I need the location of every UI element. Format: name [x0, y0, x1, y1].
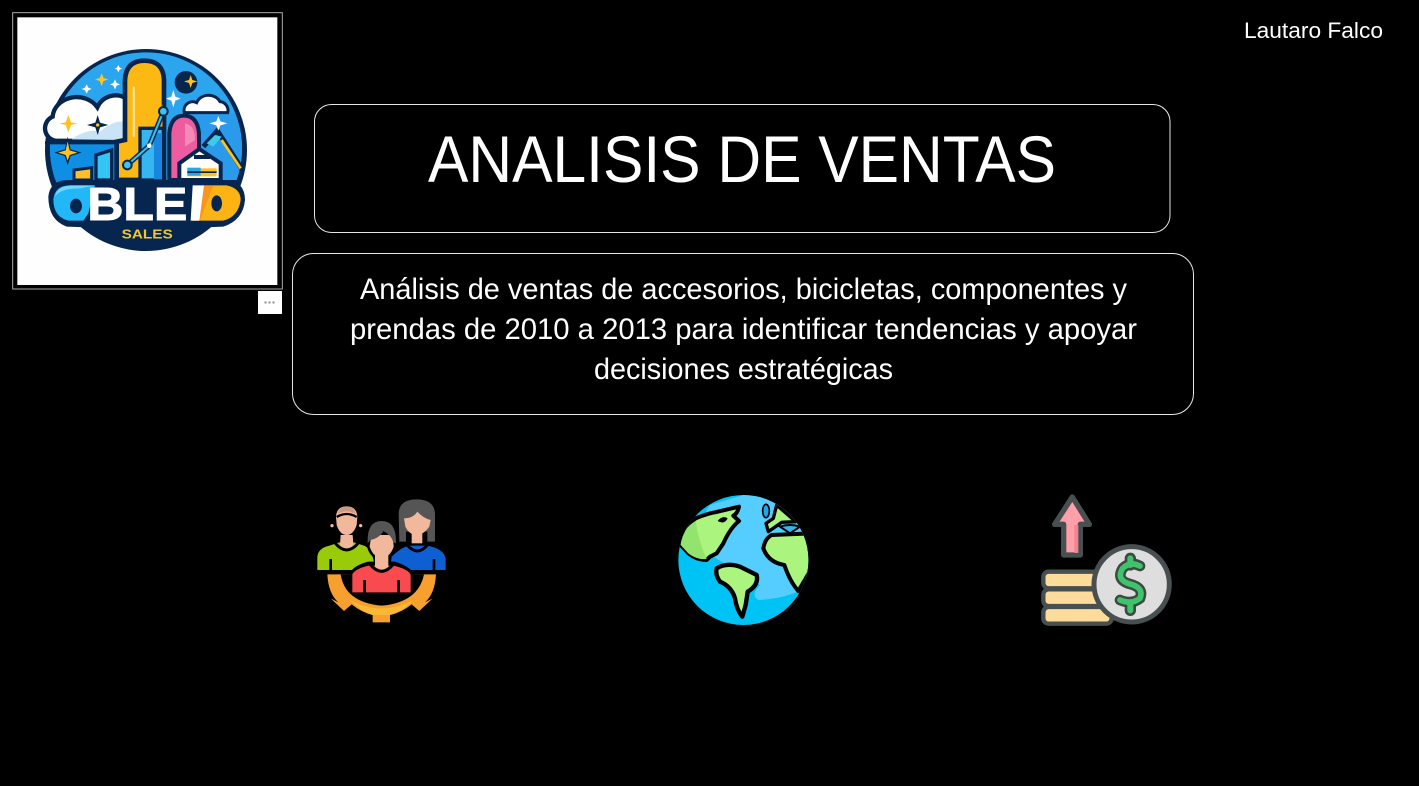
- author name: Lautaro Falco: [1244, 18, 1383, 43]
- description text: Análisis de ventas de accesorios, bicicletas, componentes y: [360, 273, 1127, 306]
- logo tagline: SALES: [122, 228, 173, 242]
- logo wordmark: BLE: [87, 178, 187, 230]
- icon: globe: [678, 495, 812, 625]
- description panel: [292, 254, 1194, 414]
- title panel: [314, 104, 1170, 232]
- logo panel: [13, 13, 282, 289]
- icon: rising money: [1043, 497, 1169, 624]
- logo wordmark bar: [191, 185, 204, 221]
- title: ANALISIS DE VENTAS: [428, 122, 1056, 196]
- icon: team with gear: [317, 499, 446, 622]
- description text: decisiones estratégicas: [594, 353, 893, 386]
- description text: prendas de 2010 a 2013 para identificar tendencias y apoyar: [350, 313, 1137, 346]
- more options button: [258, 291, 282, 314]
- description text: [350, 273, 1137, 386]
- logo badge: [43, 47, 250, 251]
